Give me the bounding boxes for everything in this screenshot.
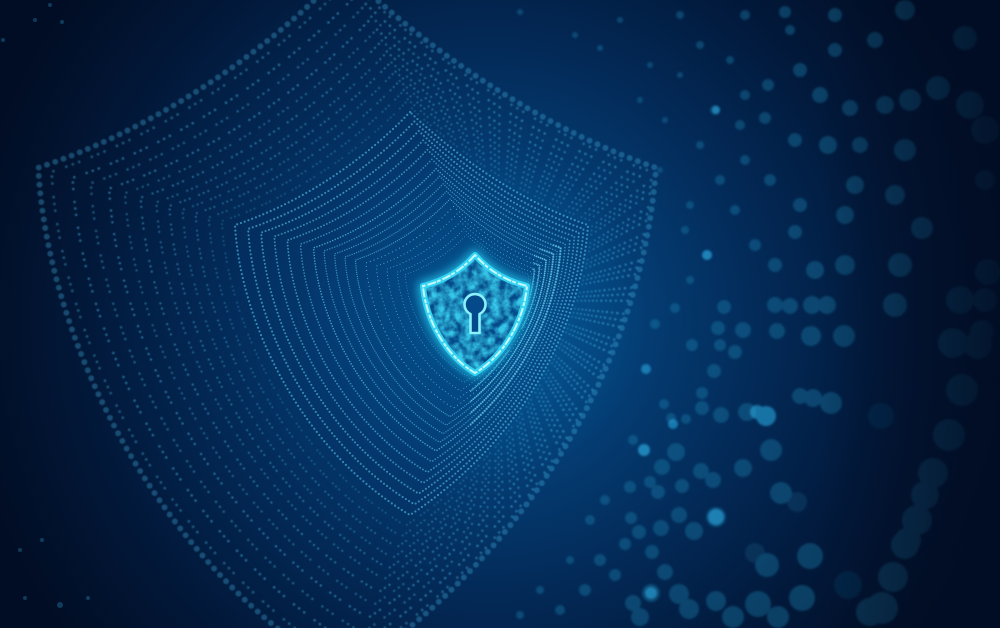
middle shield: bright rays right of center — [470, 244, 562, 426]
icon: keyhole — [465, 294, 486, 333]
middle shield: edge contour — [235, 112, 588, 515]
bokeh dots: bright highlights — [638, 106, 776, 599]
icon: mottled network texture — [426, 260, 524, 370]
scattered dots: corners — [1, 3, 90, 608]
bokeh dots: far right strand — [856, 116, 1000, 626]
icon: shield body — [423, 255, 527, 373]
icon: shield outline highlight — [423, 255, 527, 373]
icon: outer glow — [423, 255, 527, 373]
middle shield: dotted wireframe — [235, 112, 588, 515]
middle shield: perspective dot grid — [248, 122, 583, 504]
outer shield: edge contour — [38, 0, 656, 628]
icon: glowing shield with keyhole — [420, 252, 530, 376]
icon: shield outline — [423, 255, 527, 373]
middle shield: dark interior — [235, 112, 588, 515]
bokeh dots: right side field — [516, 0, 1000, 628]
central glow — [280, 120, 680, 520]
outer shield: perspective dot grid — [52, 0, 652, 628]
outer shield: dotted wireframe — [38, 0, 656, 628]
